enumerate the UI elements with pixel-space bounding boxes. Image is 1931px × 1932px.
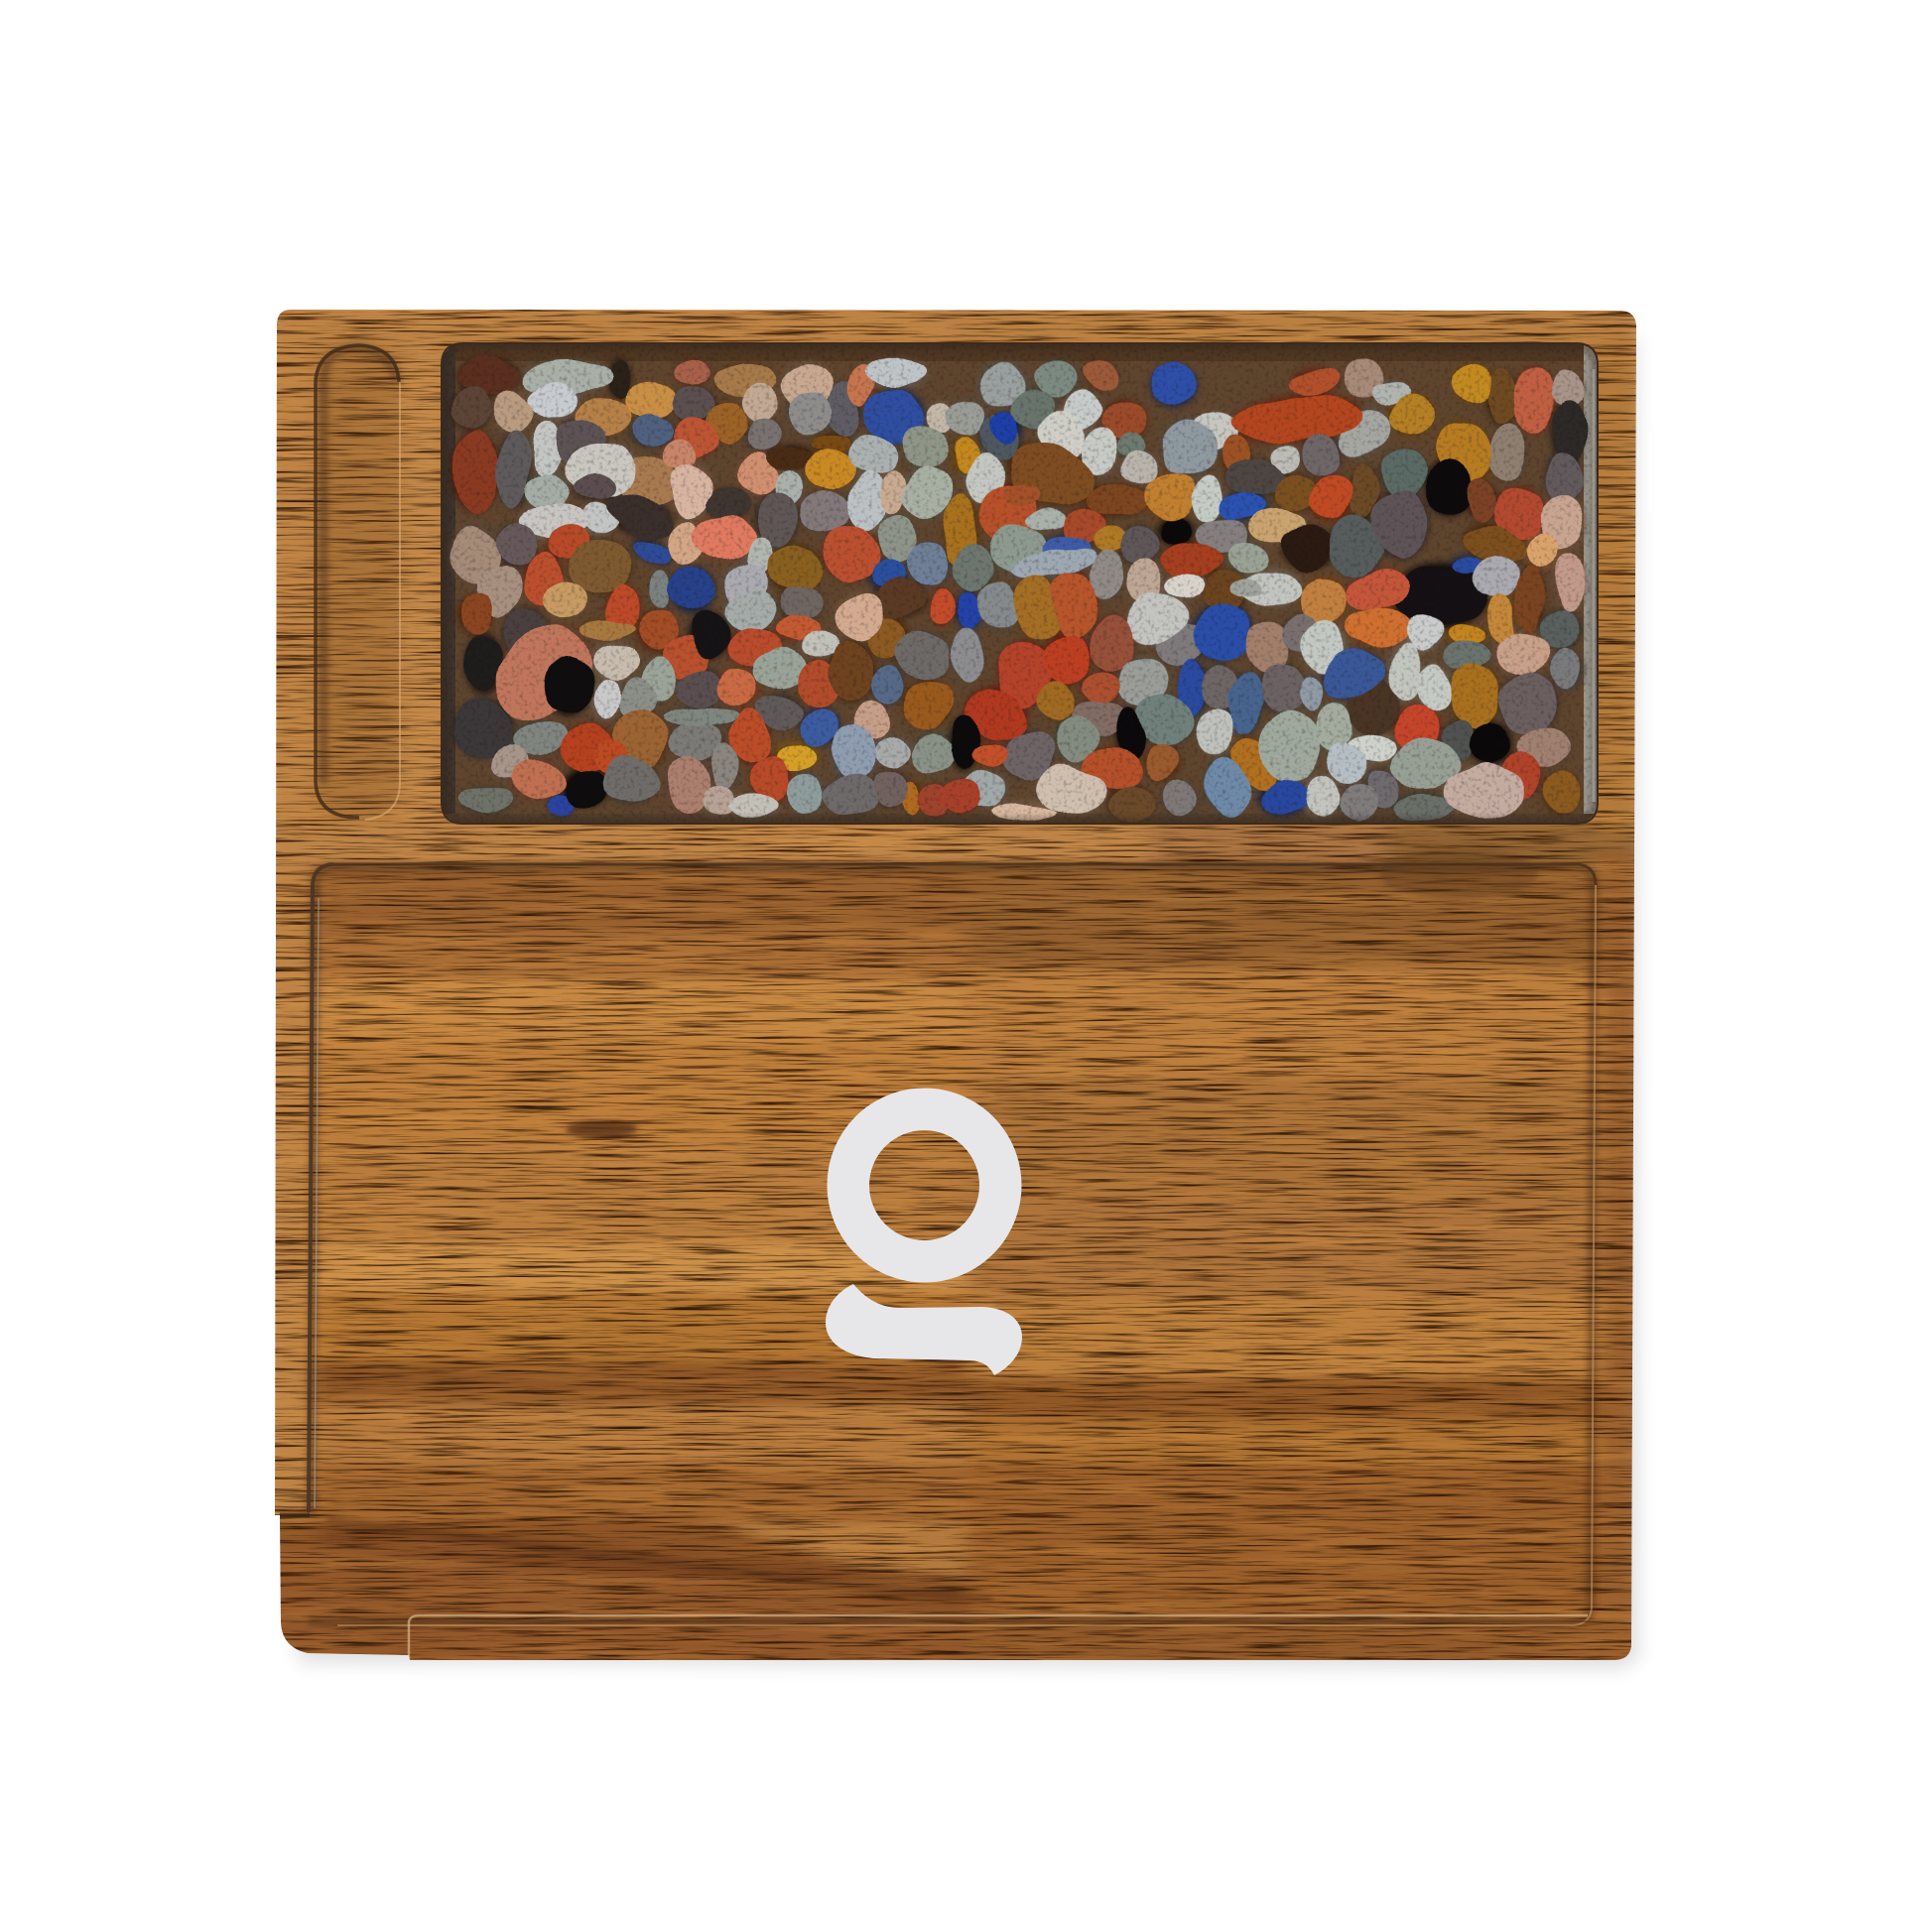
burl figure [1379, 847, 1538, 899]
wood knot [566, 1120, 637, 1138]
tray recess [280, 864, 1596, 1625]
stones, left half [451, 358, 954, 816]
wooden board [258, 298, 1651, 1677]
lower wedge and strip [280, 1516, 973, 1627]
wood colour bands [258, 298, 1651, 1677]
logo: white ring and swoosh [826, 1088, 1022, 1375]
stones [451, 358, 1585, 822]
logo swoosh [826, 1284, 1022, 1375]
resin inner shading [444, 345, 1596, 822]
right half tray bands [966, 864, 1602, 968]
board drop shadow [293, 337, 1639, 1669]
stone window [442, 343, 1598, 824]
slot recess [314, 344, 401, 821]
stones, right half [944, 360, 1585, 822]
logo ring [828, 1088, 1022, 1282]
bottom lip and notch [409, 1615, 1588, 1660]
wood grain overlay [268, 303, 1647, 1667]
stone speckle texture [442, 343, 1598, 824]
left half tray bands [312, 864, 966, 931]
hazy stones beneath the resin [451, 358, 1585, 822]
